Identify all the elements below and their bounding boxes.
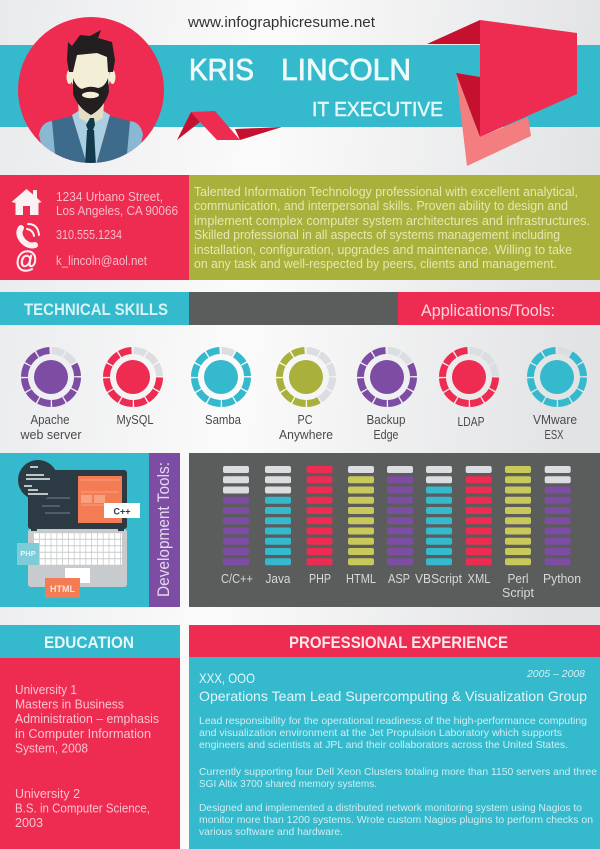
- section bar: technical skills: TECHNICAL SKILLS: [24, 301, 168, 319]
- skill ring: Apache web server: [20, 350, 82, 442]
- bar column: ASP: [387, 466, 413, 586]
- bar column: VBScript: [415, 466, 462, 586]
- panel: development tools bar chart: [189, 453, 600, 607]
- address text: Los Angeles, CA 90066: [56, 204, 178, 218]
- skill ring: Apache web server: web server: [20, 428, 82, 442]
- skill ring: VMware ESX: VMware: [533, 413, 577, 427]
- skill ring: Backup Edge: [360, 350, 414, 442]
- degree: university 2: [15, 786, 150, 830]
- degree: university 2: University 2: [15, 786, 80, 801]
- skill ring: Samba: Samba: [205, 413, 241, 427]
- job title: Operations Team Lead Supercomputing & Visualization Group: [199, 688, 587, 704]
- job paragraph 2: SGI Altix 3700 shared memory systems.: [199, 778, 377, 790]
- panel: summary: implement complex computer system architectures and infrastructures.: [194, 214, 590, 228]
- bar column: HTML: HTML: [346, 572, 376, 586]
- skill ring: Samba: [194, 350, 248, 427]
- degree: university 2: 2003: [15, 815, 43, 830]
- bar column: C/C++: C/C++: [221, 572, 253, 586]
- job paragraph 1: Lead responsibility for the operational readiness of the high-performance computing: [199, 715, 587, 727]
- skill ring: Backup Edge: Edge: [374, 428, 399, 442]
- bar column: ASP: ASP: [388, 572, 410, 586]
- degree: university 1: University 1: [15, 682, 77, 697]
- job title: IT EXECUTIVE: [312, 99, 443, 121]
- panel: summary: [189, 175, 600, 280]
- name heading: [189, 52, 411, 87]
- address text: 1234 Urbano Street,: [56, 190, 163, 204]
- name heading: KRIS: [189, 52, 254, 87]
- large folded ribbon: [427, 20, 577, 166]
- skill ring: Apache web server: Apache: [30, 413, 70, 427]
- bar column: Python: Python: [543, 572, 581, 586]
- job paragraph 1: engineers and scientists at JPL and their collaborators across the United States.: [199, 739, 568, 751]
- icon: at sign: @: [15, 247, 38, 274]
- bar column: Java: Java: [266, 572, 291, 586]
- bar column: Perl Script: [502, 466, 535, 600]
- bar column: Perl Script: Perl: [508, 572, 528, 586]
- job paragraph 1: and visualization environment at the Jet Propulsion Laboratory which supports: [199, 727, 562, 739]
- job paragraph 2: [199, 766, 597, 790]
- panel: summary: Skilled professional in all aspects of systems management including: [194, 228, 560, 242]
- bar column: XML: [466, 466, 492, 586]
- job paragraph 3: monitor more than 1200 systems. Wrote custom Nagios plugins to perform checks on: [199, 814, 593, 826]
- panel: laptop illustration: [0, 453, 149, 607]
- section bar: technical skills: [0, 292, 398, 325]
- experience heading: PROFESSIONAL EXPERIENCE: [289, 634, 508, 652]
- panel: contact: [0, 175, 189, 280]
- skill ring: PC Anywhere: PC: [298, 413, 312, 427]
- small folded ribbon: [177, 111, 282, 140]
- panel: summary: communication, and interpersonal skills. Proven ability to design and: [194, 199, 568, 213]
- panel: summary: on any task and well-respected by peers, clients and management.: [194, 257, 557, 271]
- label: PHP: PHP: [20, 549, 36, 558]
- header band: [0, 45, 600, 127]
- skill ring: VMware ESX: ESX: [544, 428, 564, 442]
- panel: development tools label: [149, 453, 180, 607]
- icon: phone: [19, 224, 39, 246]
- bar column: PHP: [306, 466, 332, 586]
- label: C++: [104, 503, 140, 518]
- bar column: C/C++: [221, 466, 253, 586]
- panel: development tools label: Development Tools:: [155, 462, 173, 597]
- skill ring: MySQL: MySQL: [116, 413, 154, 427]
- job title: [199, 670, 587, 704]
- degree: university 1: Administration – emphasis: [15, 711, 159, 726]
- experience heading: [189, 625, 600, 657]
- degree: university 1: in Computer Information: [15, 726, 151, 741]
- icon: house: [12, 189, 42, 215]
- education heading: [0, 625, 180, 658]
- bar column: VBScript: VBScript: [415, 572, 462, 586]
- skill ring: PC Anywhere: [279, 350, 333, 442]
- job paragraph 1: [199, 715, 587, 751]
- job dates: 2005 – 2008: [526, 668, 585, 680]
- name heading: LINCOLN: [281, 52, 411, 87]
- panel: professional experience: [189, 625, 600, 849]
- website url: www.infographicresume.net: [187, 14, 376, 31]
- degree: university 2: B.S. in Computer Science,: [15, 800, 150, 816]
- bar column: PHP: PHP: [309, 572, 331, 586]
- job paragraph 3: Designed and implemented a distributed network monitoring system using Nagios to: [199, 802, 582, 814]
- job paragraph 3: various software and hardware.: [199, 826, 343, 838]
- bar column: Perl Script: Script: [502, 586, 535, 600]
- section bar: applications and tools: [398, 292, 600, 325]
- phone number: 310.555.1234: [56, 228, 122, 242]
- icon: laptop: [28, 470, 127, 587]
- bar column: Java: [265, 466, 291, 586]
- portrait: bearded man in vest: [18, 17, 164, 165]
- label: C++: C++: [113, 506, 131, 516]
- degree: university 1: [15, 682, 159, 756]
- code magnifier circle: [18, 460, 58, 500]
- label: HTML: HTML: [50, 584, 75, 594]
- section bar: applications and tools: Applications/Tools:: [421, 302, 555, 320]
- bar column: XML: XML: [468, 572, 491, 586]
- job title: XXX, OOO: [199, 670, 255, 686]
- email: k_lincoln@aol.net: [56, 254, 147, 268]
- skill ring: LDAP: [442, 350, 496, 429]
- degree: university 1: System, 2008: [15, 740, 88, 756]
- label: HTML: [45, 578, 80, 598]
- job paragraph 2: Currently supporting four Dell Xeon Clusters totaling more than 1150 servers and three: [199, 766, 597, 778]
- skill ring: LDAP: LDAP: [458, 415, 484, 429]
- address text: [56, 190, 178, 218]
- skill ring: PC Anywhere: Anywhere: [279, 428, 333, 442]
- skill ring: MySQL: [106, 350, 160, 427]
- bar column: HTML: [346, 466, 376, 586]
- panel: summary: Talented Information Technology professional with excellent analytical,: [194, 185, 578, 199]
- label: PHP: [17, 543, 39, 565]
- education heading: EDUCATION: [44, 634, 134, 652]
- bar column: Python: [543, 466, 581, 586]
- job paragraph 3: [199, 802, 593, 838]
- degree: university 1: Masters in Business: [15, 696, 124, 712]
- skill ring: VMware ESX: [530, 350, 584, 442]
- skill ring: Backup Edge: Backup: [366, 413, 406, 427]
- panel: summary: installation, configuration, upgrades and maintenance. Willing to take: [194, 243, 572, 257]
- panel: education: [0, 625, 180, 849]
